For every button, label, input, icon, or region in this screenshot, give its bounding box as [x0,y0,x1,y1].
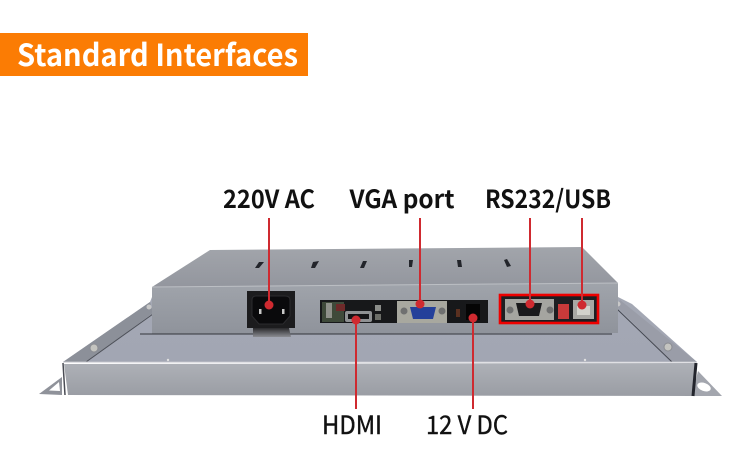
title banner: Standard Interfaces [17,31,298,75]
mounting tab left [39,377,62,395]
lower panel front edge [64,363,695,396]
callout: RS232/USB [485,180,611,310]
HDMI and VGA board [320,300,488,323]
vent slots [255,259,511,268]
RS232 and USB highlighted group [500,295,598,323]
enclosure front [152,283,618,334]
callout: VGA port [349,180,455,308]
screws [90,344,98,352]
callout: HDMI: HDMI [322,406,382,442]
power socket [247,291,295,337]
callout: 220V AC [223,180,315,310]
right flange [617,300,697,362]
monitor rear view [39,247,722,396]
callout: 220V AC: 220V AC [223,180,315,216]
enclosure top [152,247,618,287]
callout: VGA port: VGA port [349,180,455,216]
mounting tab right [692,371,722,396]
callout: 12 V DC: 12 V DC [426,406,508,442]
left flange [63,302,153,362]
callout: 12 V DC [426,314,508,442]
callout: HDMI [322,316,382,442]
callout: RS232/USB: RS232/USB [485,180,611,216]
lower panel back [63,297,697,362]
